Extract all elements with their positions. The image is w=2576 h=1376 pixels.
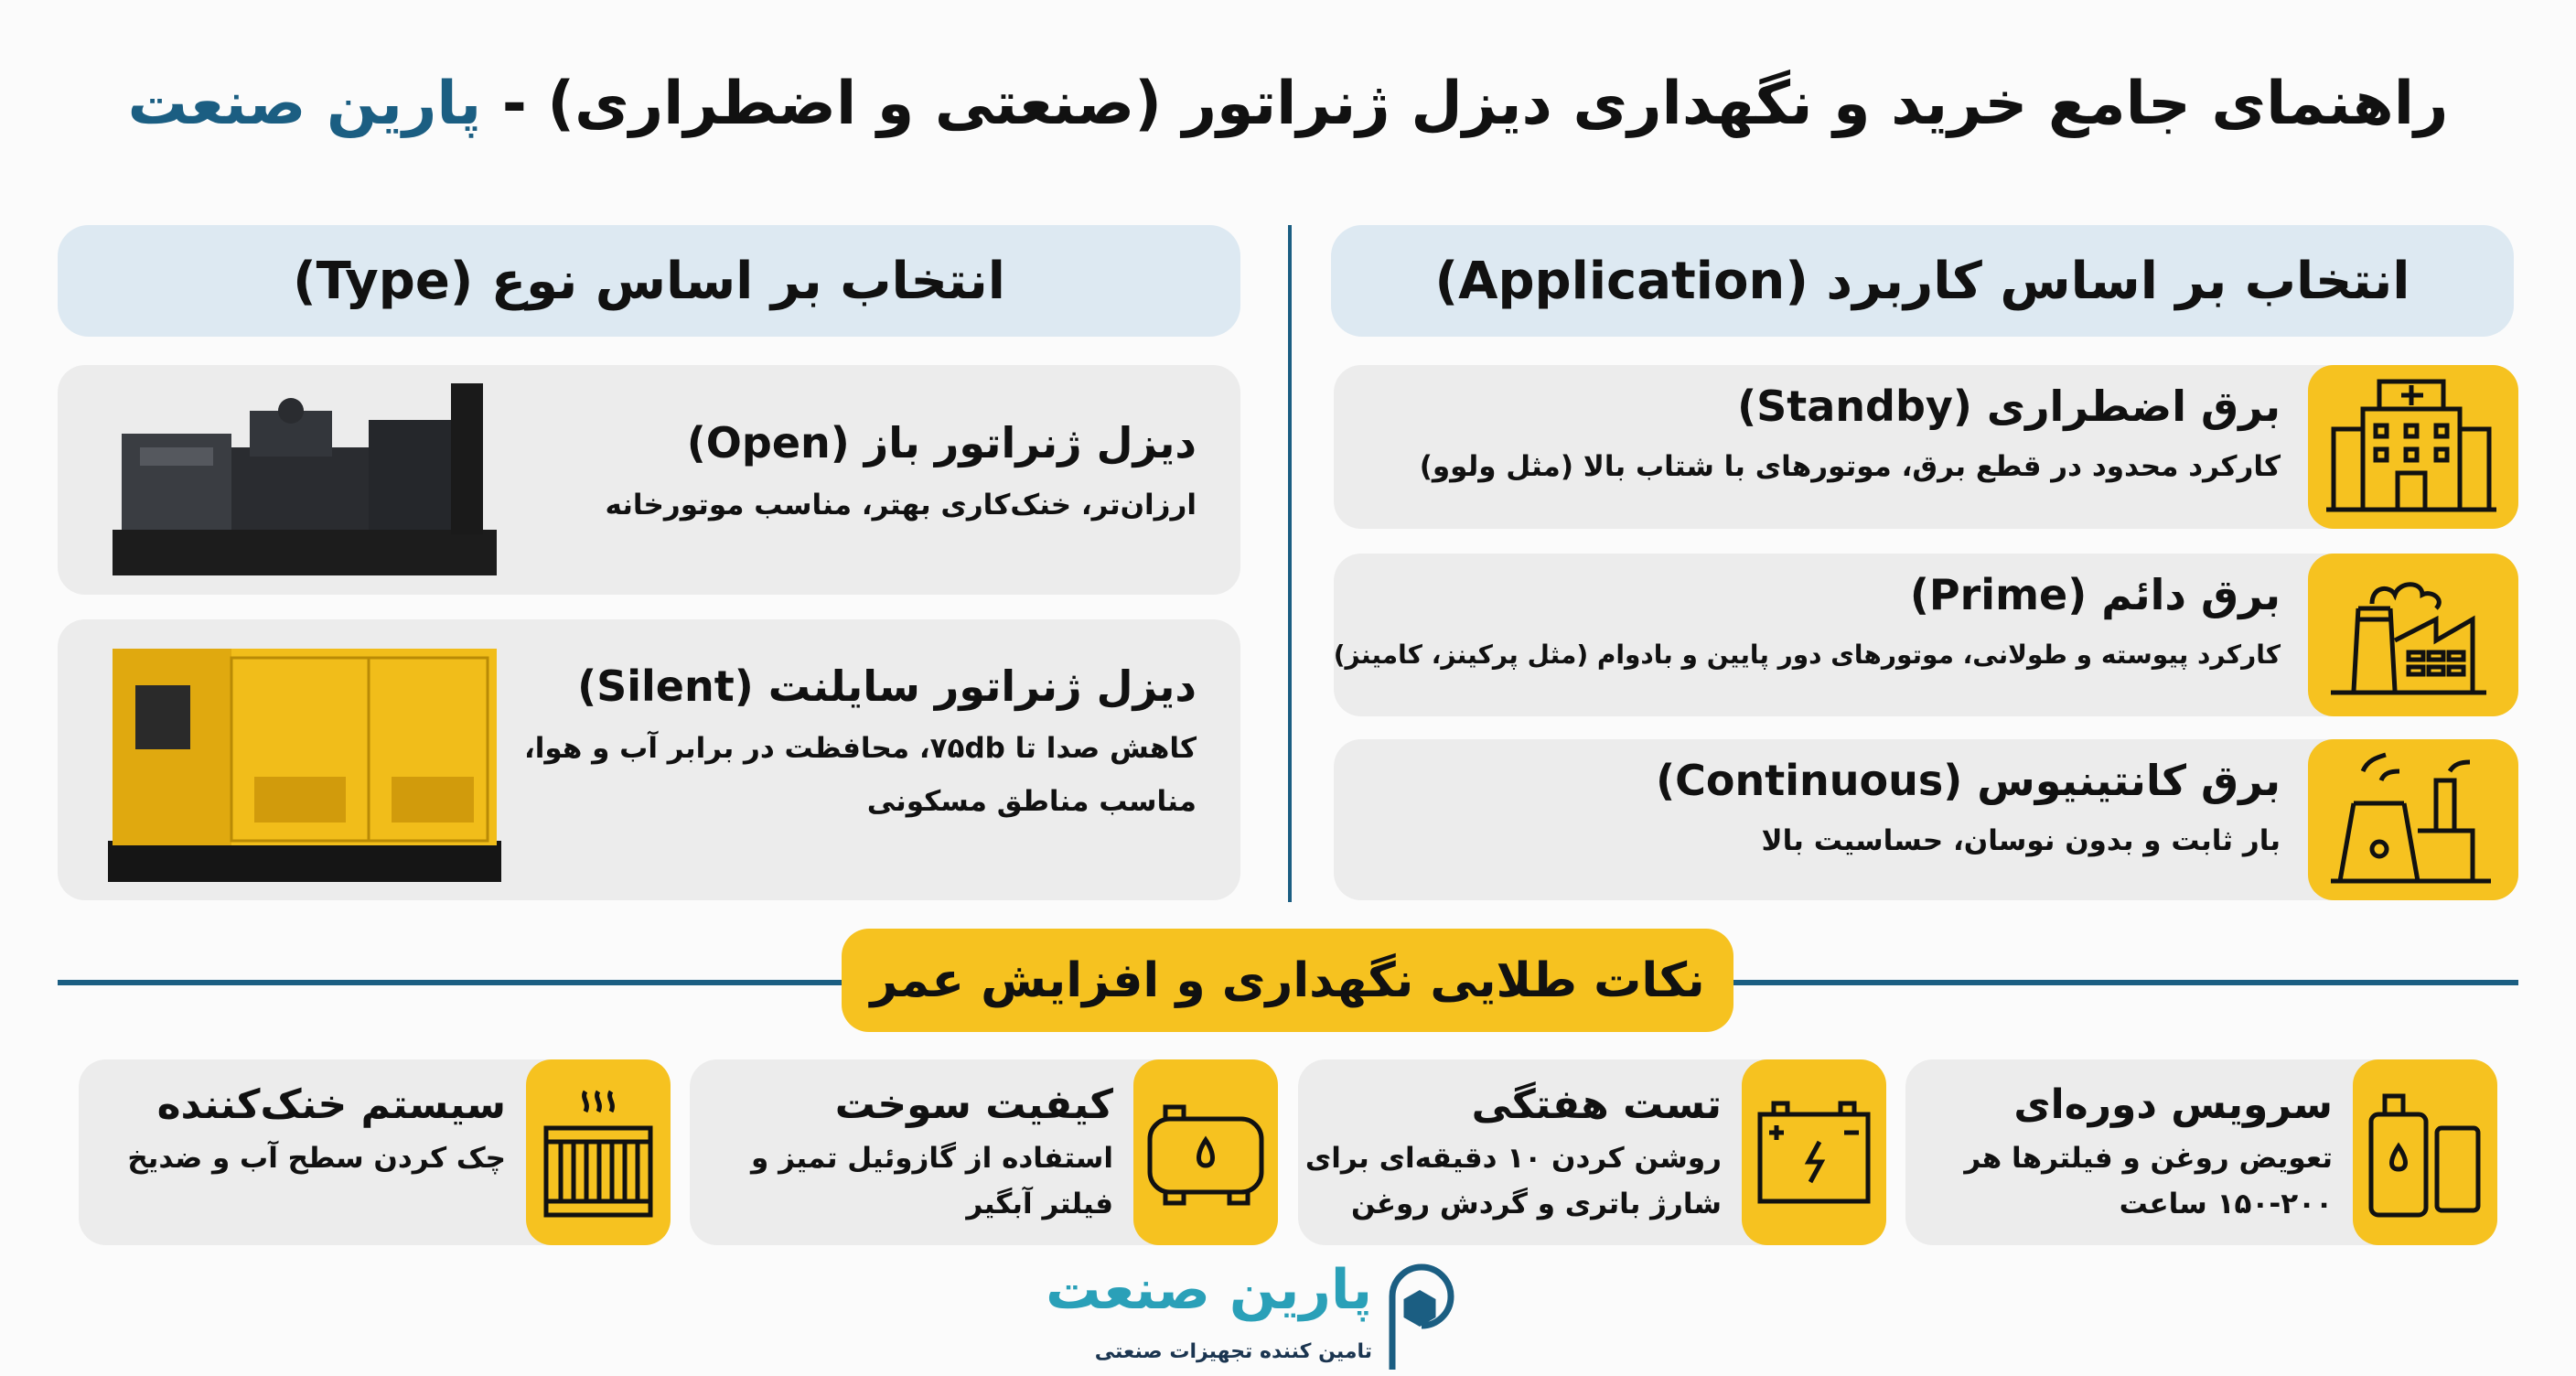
text: open: دیزل ژنراتور باز (Open) <box>687 418 1197 468</box>
text: weekly test: تست هفتگی <box>1472 1081 1722 1128</box>
header: type <box>58 225 1240 337</box>
image: silent generator <box>108 649 501 882</box>
text: standby: برق اضطراری (Standby) <box>1737 382 2281 431</box>
text: fuel quality: کیفیت سوخت <box>835 1081 1113 1128</box>
image: open generator <box>113 383 497 575</box>
text: prime <box>1334 570 2281 670</box>
text: fuel quality: فیلتر آبگیر <box>966 1188 1113 1220</box>
icon: radiator <box>526 1059 671 1245</box>
tip: cooling system <box>79 1059 671 1245</box>
text: silent: کاهش صدا تا ۷۵db، محافظت در برابر آب و هوا، <box>524 732 1197 765</box>
card: silent generator <box>58 619 1240 900</box>
card: open generator <box>58 365 1240 595</box>
logo text: پارین صنعت <box>1046 1258 1372 1322</box>
card: prime <box>1334 554 2518 716</box>
icon: hospital <box>2308 365 2518 529</box>
text: cooling system: چک کردن سطح آب و ضدیخ <box>127 1142 506 1175</box>
text: standby <box>1420 382 2281 483</box>
tip: weekly test <box>1298 1059 1886 1245</box>
text: silent: دیزل ژنراتور سایلنت (Silent) <box>577 661 1197 711</box>
text: silent <box>524 661 1197 818</box>
text: periodic service: سرویس دوره‌ای <box>2013 1081 2333 1128</box>
title: راهنمای جامع خرید و نگهداری دیزل ژنراتور (صنعتی و اضطراری) - پارین صنعت <box>128 70 2448 138</box>
icon: fuel tank <box>1133 1059 1278 1245</box>
text: prime: برق دائم (Prime) <box>1910 570 2281 619</box>
icon: battery <box>1742 1059 1886 1245</box>
logo <box>1046 1258 1454 1370</box>
text: continuous: بار ثابت و بدون نوسان، حساسیت بالا <box>1762 824 2281 857</box>
logo mark <box>1389 1264 1454 1370</box>
header: application: انتخاب بر اساس کاربرد (Application) <box>1435 251 2410 311</box>
text: weekly test: شارژ باتری و گردش روغن <box>1351 1188 1722 1220</box>
icon: power plant <box>2308 739 2518 900</box>
icon: factory <box>2308 554 2518 716</box>
text: weekly test <box>1305 1081 1722 1220</box>
card: standby <box>1334 365 2518 529</box>
text: fuel quality <box>750 1081 1113 1220</box>
card: continuous <box>1334 739 2518 900</box>
text: cooling system <box>127 1081 506 1175</box>
logo: تامین کننده تجهیزات صنعتی <box>1095 1340 1372 1363</box>
tip: periodic service <box>1905 1059 2497 1245</box>
icon: oil can <box>2353 1059 2497 1245</box>
text: continuous: برق کانتینیوس (Continuous) <box>1656 756 2281 805</box>
header: application <box>1331 225 2514 337</box>
text: continuous <box>1656 756 2281 857</box>
text: periodic service: ۱۵۰-۲۰۰ ساعت <box>2120 1188 2333 1220</box>
text: open: ارزان‌تر، خنک‌کاری بهتر، مناسب موتورخانه <box>605 489 1197 521</box>
text: standby: کارکرد محدود در قطع برق، موتورهای با شتاب بالا (مثل ولوو) <box>1420 450 2281 483</box>
text: fuel quality: استفاده از گازوئیل تمیز و <box>751 1142 1113 1175</box>
text: periodic service: تعویض روغن و فیلترها هر <box>1964 1142 2333 1175</box>
text: silent: مناسب مناطق مسکونی <box>867 785 1197 818</box>
banner: golden tips <box>842 929 1733 1032</box>
banner: golden tips: نکات طلایی نگهداری و افزایش عمر <box>870 953 1705 1008</box>
header: type: انتخاب بر اساس نوع (Type) <box>293 251 1005 311</box>
text: open <box>605 418 1197 521</box>
text: periodic service <box>1963 1081 2333 1220</box>
text: weekly test: روشن کردن ۱۰ دقیقه‌ای برای <box>1305 1142 1722 1175</box>
divider line <box>58 980 2518 985</box>
text: cooling system: سیستم خنک‌کننده <box>157 1081 506 1128</box>
text: prime: کارکرد پیوسته و طولانی، موتورهای دور پایین و بادوام (مثل پرکینز، کامینز) <box>1334 640 2281 670</box>
tip: fuel quality <box>690 1059 1278 1245</box>
